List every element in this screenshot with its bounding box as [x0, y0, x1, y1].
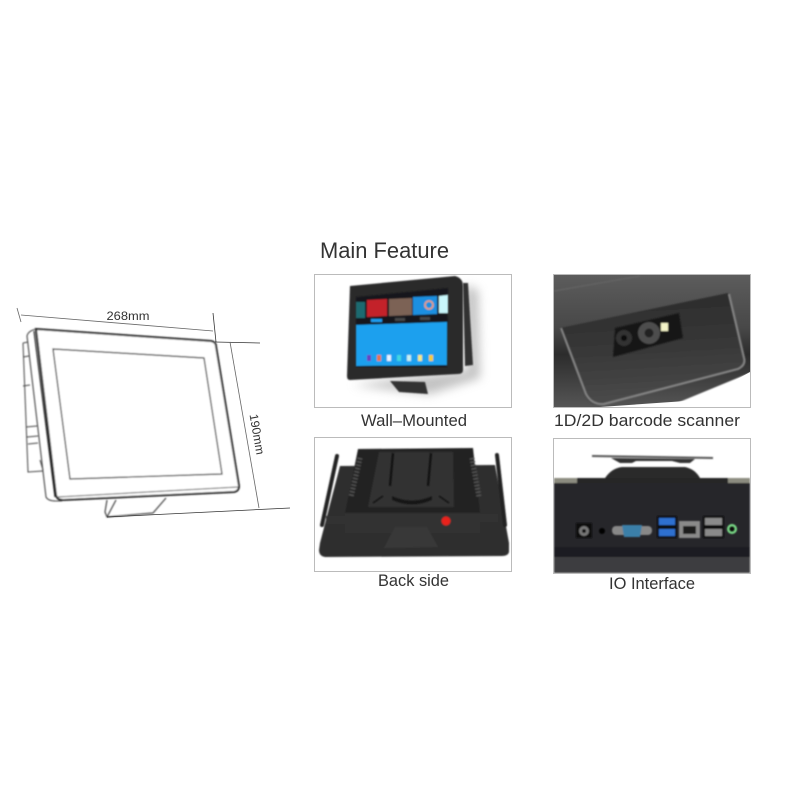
dimension label: 268mm: 268mm — [106, 309, 150, 323]
RJ45 port — [679, 521, 700, 538]
recess — [562, 292, 743, 370]
monitor shadow — [352, 285, 480, 394]
caption: barcode scanner: 1D/2D barcode scanner — [554, 412, 741, 430]
mount plate — [592, 455, 713, 459]
panel: back side — [314, 438, 512, 572]
white corner — [678, 372, 750, 402]
panel: barcode scanner — [554, 274, 752, 410]
antennas — [322, 455, 505, 525]
recess rim — [561, 294, 744, 404]
vents — [351, 458, 479, 497]
USB3 stack — [657, 516, 677, 538]
monitor body — [347, 276, 463, 380]
USB2 stack — [703, 516, 724, 538]
ports — [576, 516, 736, 538]
rear housing — [345, 448, 480, 533]
panel: IO interface — [554, 438, 750, 574]
panel: wall-mounted — [314, 274, 512, 408]
VGA port — [612, 526, 652, 535]
caption: IO interface: IO Interface — [609, 575, 695, 593]
body — [554, 482, 750, 548]
scanner module — [613, 313, 683, 357]
screen outline — [53, 349, 222, 479]
centre bump — [384, 527, 438, 548]
monitor outline — [23, 329, 239, 517]
dimension lines — [17, 308, 290, 517]
caption: back side: Back side — [378, 572, 449, 590]
line drawing: monitor dimensions — [17, 308, 290, 517]
base panel — [319, 465, 509, 557]
stand — [390, 381, 428, 394]
DC jack — [576, 523, 592, 538]
rear antenna — [463, 283, 473, 366]
housing — [554, 275, 750, 407]
VESA plate — [368, 452, 454, 507]
dimension label: 190mm: 190mm — [246, 413, 267, 456]
caption: wall-mounted: Wall–Mounted — [361, 412, 467, 430]
monitor screen — [356, 288, 448, 367]
infographic canvas — [16, 242, 751, 589]
red button — [442, 516, 450, 526]
heading: Main Feature — [320, 238, 449, 263]
audio jack — [728, 525, 736, 533]
